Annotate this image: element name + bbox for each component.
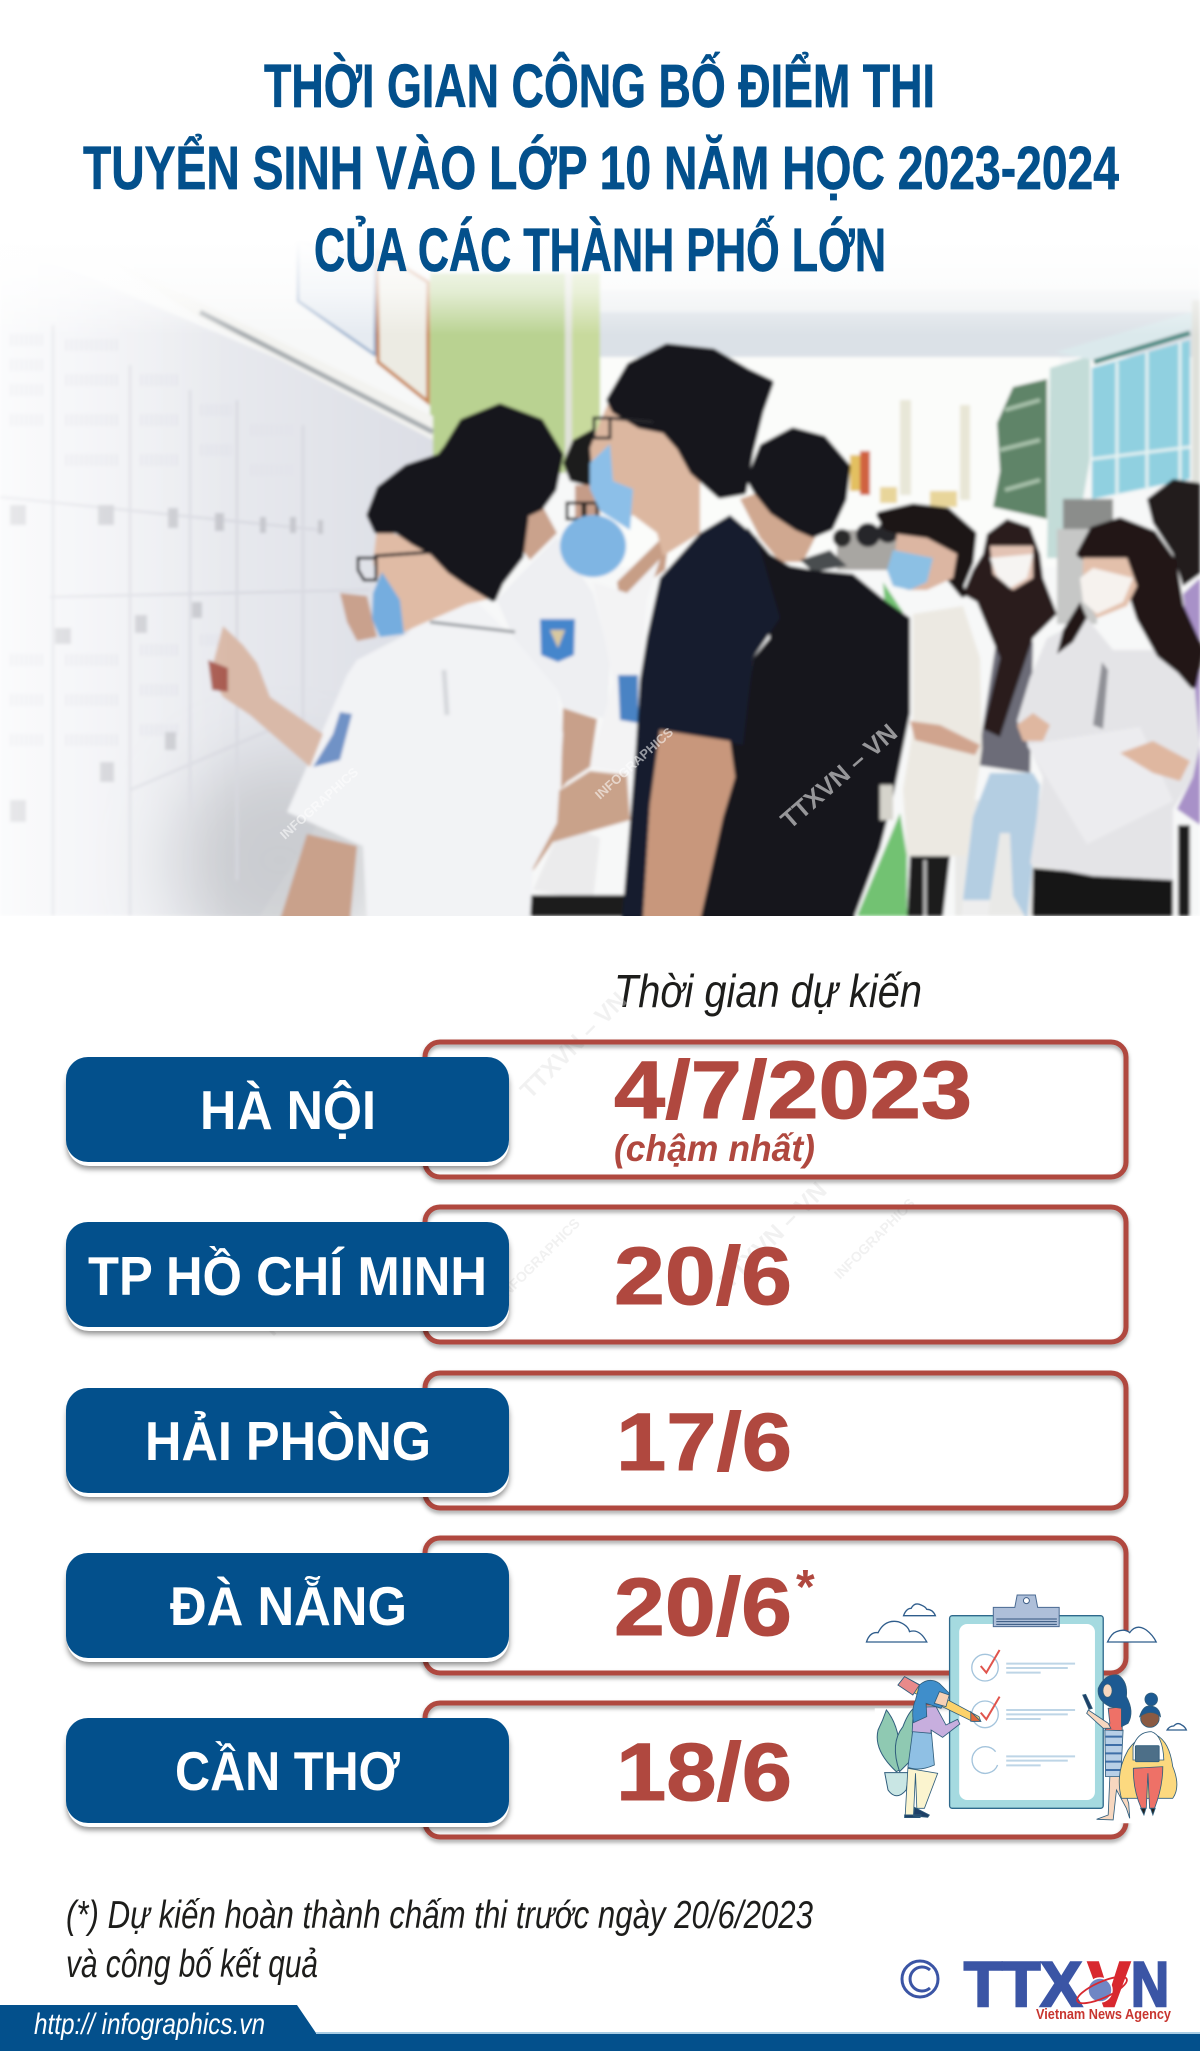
- city pill: [66, 1388, 509, 1497]
- date: 17/6: [616, 1397, 792, 1488]
- wall rail and posters: [198, 250, 436, 440]
- woman with giant pencil: [898, 1677, 981, 1818]
- date box: [425, 1207, 1126, 1342]
- date box: [425, 1373, 1126, 1508]
- photo watermark: TTXVN – VN: [776, 719, 903, 835]
- row 5: Can Tho: [66, 1703, 1126, 1837]
- row 1: Hanoi: [66, 1042, 1126, 1177]
- back girl with floral top and jeans: [962, 519, 1057, 920]
- copyright mark: [902, 1961, 938, 1997]
- date box: [425, 1538, 1126, 1673]
- city pill: HÀ NỘI: [200, 1079, 376, 1141]
- green pillar: [430, 273, 600, 473]
- photo fade at top: [130, 240, 1200, 330]
- woman with tablet: [1083, 1675, 1131, 1820]
- background watermarks: TTXVN – VN: [255, 1227, 372, 1344]
- asterisk: *: [796, 1561, 815, 1614]
- boy in white shirt with badge (second): [440, 407, 625, 916]
- column heading: Thời gian dự kiến: [614, 965, 922, 1017]
- city pill: [66, 1553, 509, 1662]
- city pill: [66, 1222, 509, 1331]
- checklist items: [972, 1650, 1075, 1773]
- wordmark: TTX: [964, 1950, 1082, 2020]
- wordmark: N: [1131, 1950, 1169, 2020]
- date: 4/7/2023: [614, 1045, 972, 1136]
- background watermarks: TTXVN – VN: [515, 987, 632, 1104]
- date: 20/6: [614, 1231, 792, 1322]
- title: THỜI GIAN CÔNG BỐ ĐIỂM THI: [264, 52, 935, 120]
- footer bar with website: http:// infographics.vn: [34, 2008, 265, 2041]
- wordmark: V: [1088, 1950, 1130, 2020]
- clipboard: [950, 1595, 1103, 1808]
- city pill: ĐÀ NẴNG: [170, 1575, 407, 1637]
- fifth boy behind backpack: [740, 431, 847, 572]
- wordmark: [964, 1950, 1169, 2020]
- note: (chậm nhất): [614, 1128, 815, 1169]
- date: 20/6: [614, 1562, 792, 1653]
- footnote: và công bố kết quả: [66, 1943, 318, 1986]
- student at right edge in purple: [1147, 479, 1200, 916]
- row 4: Da Nang: [66, 1538, 1126, 1673]
- photo watermark: INFOGRAPHICS: [592, 724, 676, 802]
- photo watermark: INFOGRAPHICS: [277, 764, 361, 842]
- backpack: [700, 527, 910, 920]
- woman with laptop on bean bag: [1119, 1693, 1177, 1815]
- notice board with result sheets: [10, 318, 436, 916]
- city pill: TP HỒ CHÍ MINH: [88, 1245, 487, 1307]
- front girl holding paper: [1017, 521, 1200, 916]
- footnote: [66, 1894, 813, 1986]
- tall boy navy shirt and arm: [622, 515, 780, 920]
- clouds: [866, 1604, 1186, 1730]
- city pill: HẢI PHÒNG: [145, 1410, 431, 1472]
- title: CỦA CÁC THÀNH PHỐ LỚN: [314, 216, 886, 284]
- illustration: clipboard with people: [866, 1595, 1186, 1823]
- globe: [1074, 1972, 1130, 2008]
- background watermarks: [255, 987, 918, 1344]
- title: [83, 52, 1119, 284]
- city pill: CẦN THƠ: [175, 1740, 400, 1802]
- city pill: [66, 1057, 509, 1166]
- background watermarks: INFOGRAPHICS: [496, 1215, 583, 1302]
- date box: [425, 1042, 1126, 1177]
- front boy in white shirt: [208, 457, 563, 920]
- tall boy head with mask: [590, 347, 770, 556]
- background watermarks: INFOGRAPHICS: [831, 1195, 918, 1282]
- row 3: Hai Phong: [66, 1373, 1126, 1508]
- plant: [877, 1708, 914, 1796]
- green bag detail: [857, 582, 907, 916]
- date: 18/6: [616, 1727, 792, 1818]
- photo: students checking exam notice board: [0, 240, 1200, 960]
- photo watermark: [277, 719, 903, 842]
- row 2: Ho Chi Minh City: [66, 1207, 1126, 1342]
- third boy with blue mask: [527, 429, 670, 875]
- footer bar with website: [0, 2005, 1200, 2051]
- corridor background: [600, 290, 1200, 916]
- date box: [425, 1703, 1126, 1837]
- logo: TTXVN: [902, 1950, 1172, 2023]
- footnote: (*) Dự kiến hoàn thành chấm thi trước ngày 20/6/2023: [66, 1894, 813, 1937]
- background watermarks: TTXVN – VN: [715, 1177, 832, 1294]
- logo: TTXVN: Vietnam News Agency: [1036, 2006, 1172, 2023]
- city pill: [66, 1718, 509, 1827]
- girl in white shirt with blue mask: [880, 507, 982, 916]
